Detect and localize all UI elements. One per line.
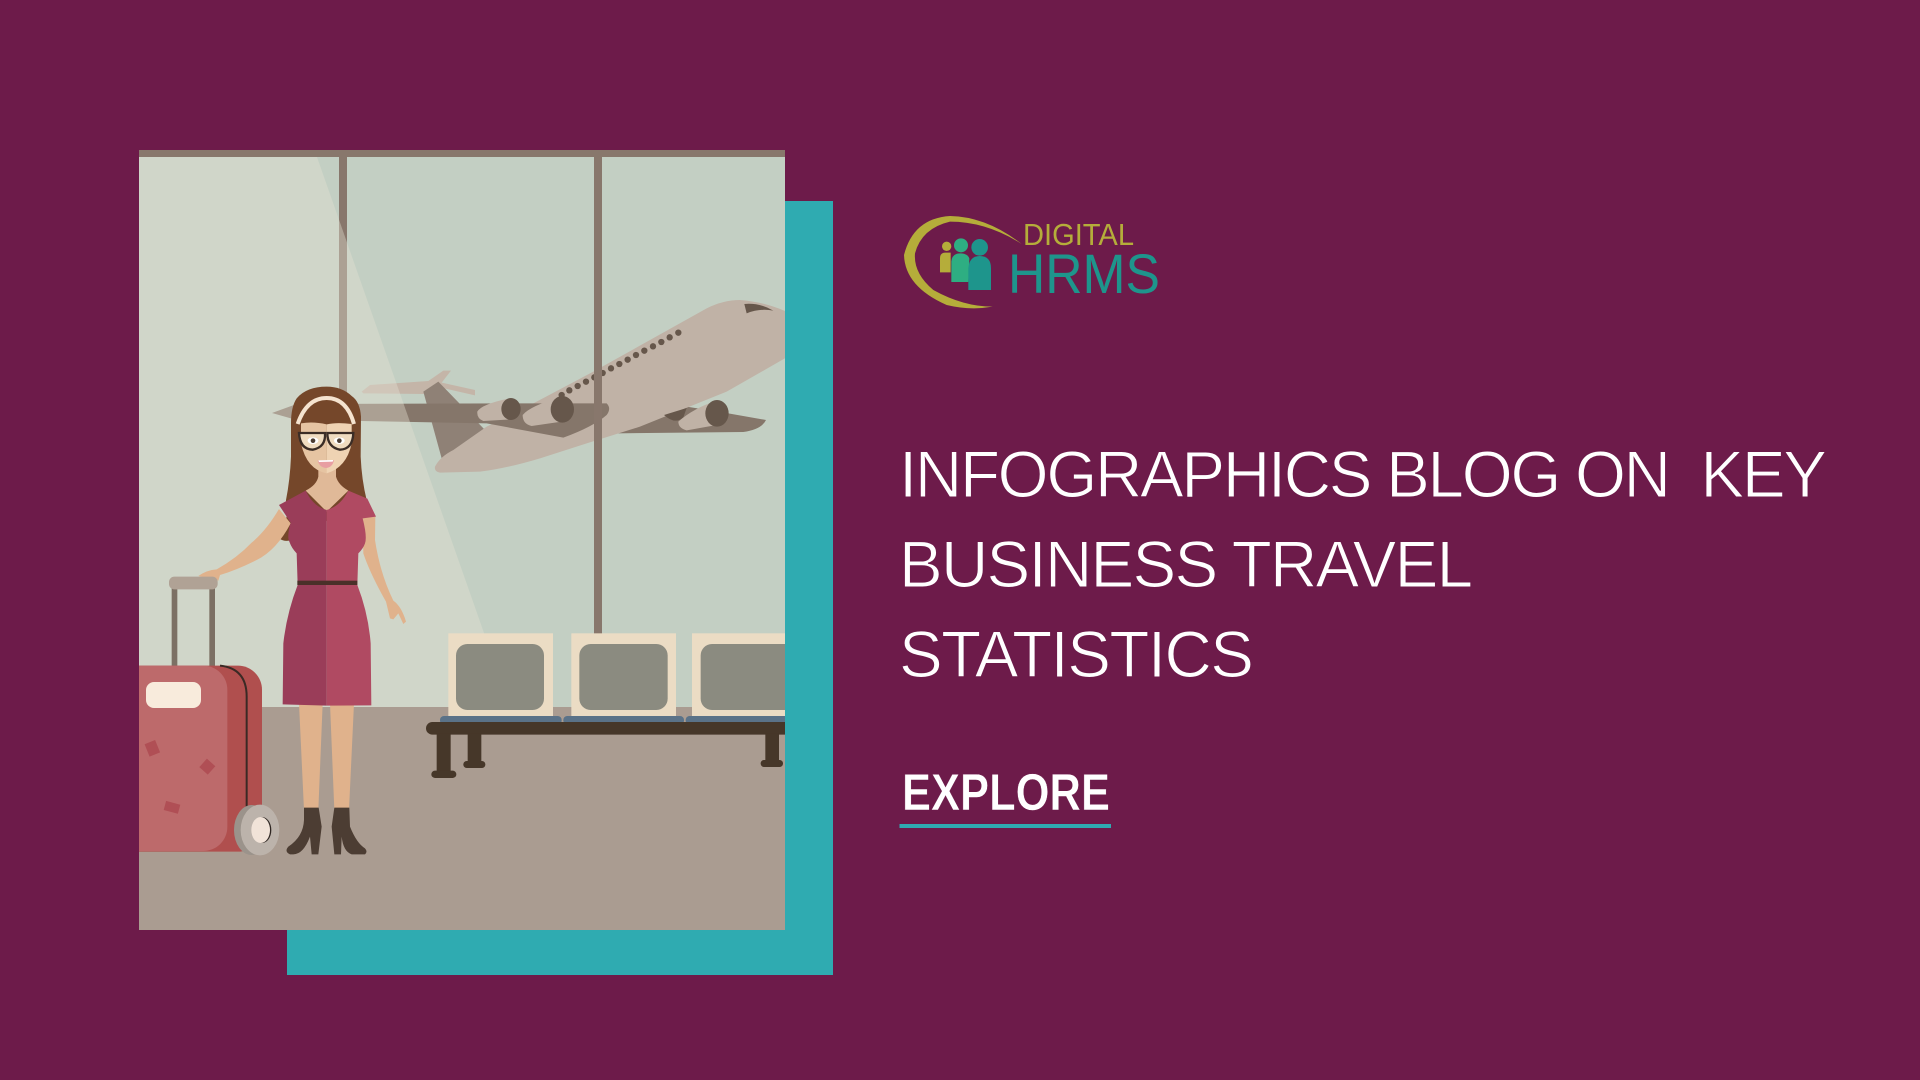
- teal offset block: [287, 201, 833, 975]
- logo word: DIGITAL: DIGITAL: [1023, 217, 1134, 252]
- woman traveller: [198, 387, 406, 854]
- title: [899, 438, 1827, 691]
- icon: suitcase: [139, 576, 280, 856]
- window frame: [139, 150, 785, 635]
- floor: [139, 707, 785, 930]
- explore link: EXPLORE: [902, 764, 1110, 822]
- icon: swoosh and people: [904, 216, 1022, 308]
- banner canvas: [139, 150, 1824, 975]
- dress: [279, 491, 327, 706]
- panel: airport illustration: [97, 150, 799, 930]
- title: STATISTICS: [899, 618, 1254, 691]
- logo word: HRMS: HRMS: [1008, 242, 1160, 305]
- belt: [297, 581, 357, 585]
- light beam: [139, 157, 510, 707]
- logo: Digital HRMS: [904, 216, 1160, 308]
- title: INFOGRAPHICS BLOG ON KEY: [899, 438, 1827, 511]
- icon: airplane: [272, 300, 787, 473]
- bench with seats: [426, 633, 799, 778]
- title: BUSINESS TRAVEL: [899, 528, 1473, 601]
- face: [301, 422, 327, 473]
- mouth: [318, 460, 334, 468]
- boots: [287, 808, 322, 854]
- legs: [299, 703, 323, 810]
- arms: [198, 509, 291, 581]
- window glass: [139, 150, 785, 710]
- hair: [279, 387, 367, 541]
- hairband: [298, 398, 354, 424]
- glasses: [299, 433, 353, 450]
- neck: [306, 467, 348, 512]
